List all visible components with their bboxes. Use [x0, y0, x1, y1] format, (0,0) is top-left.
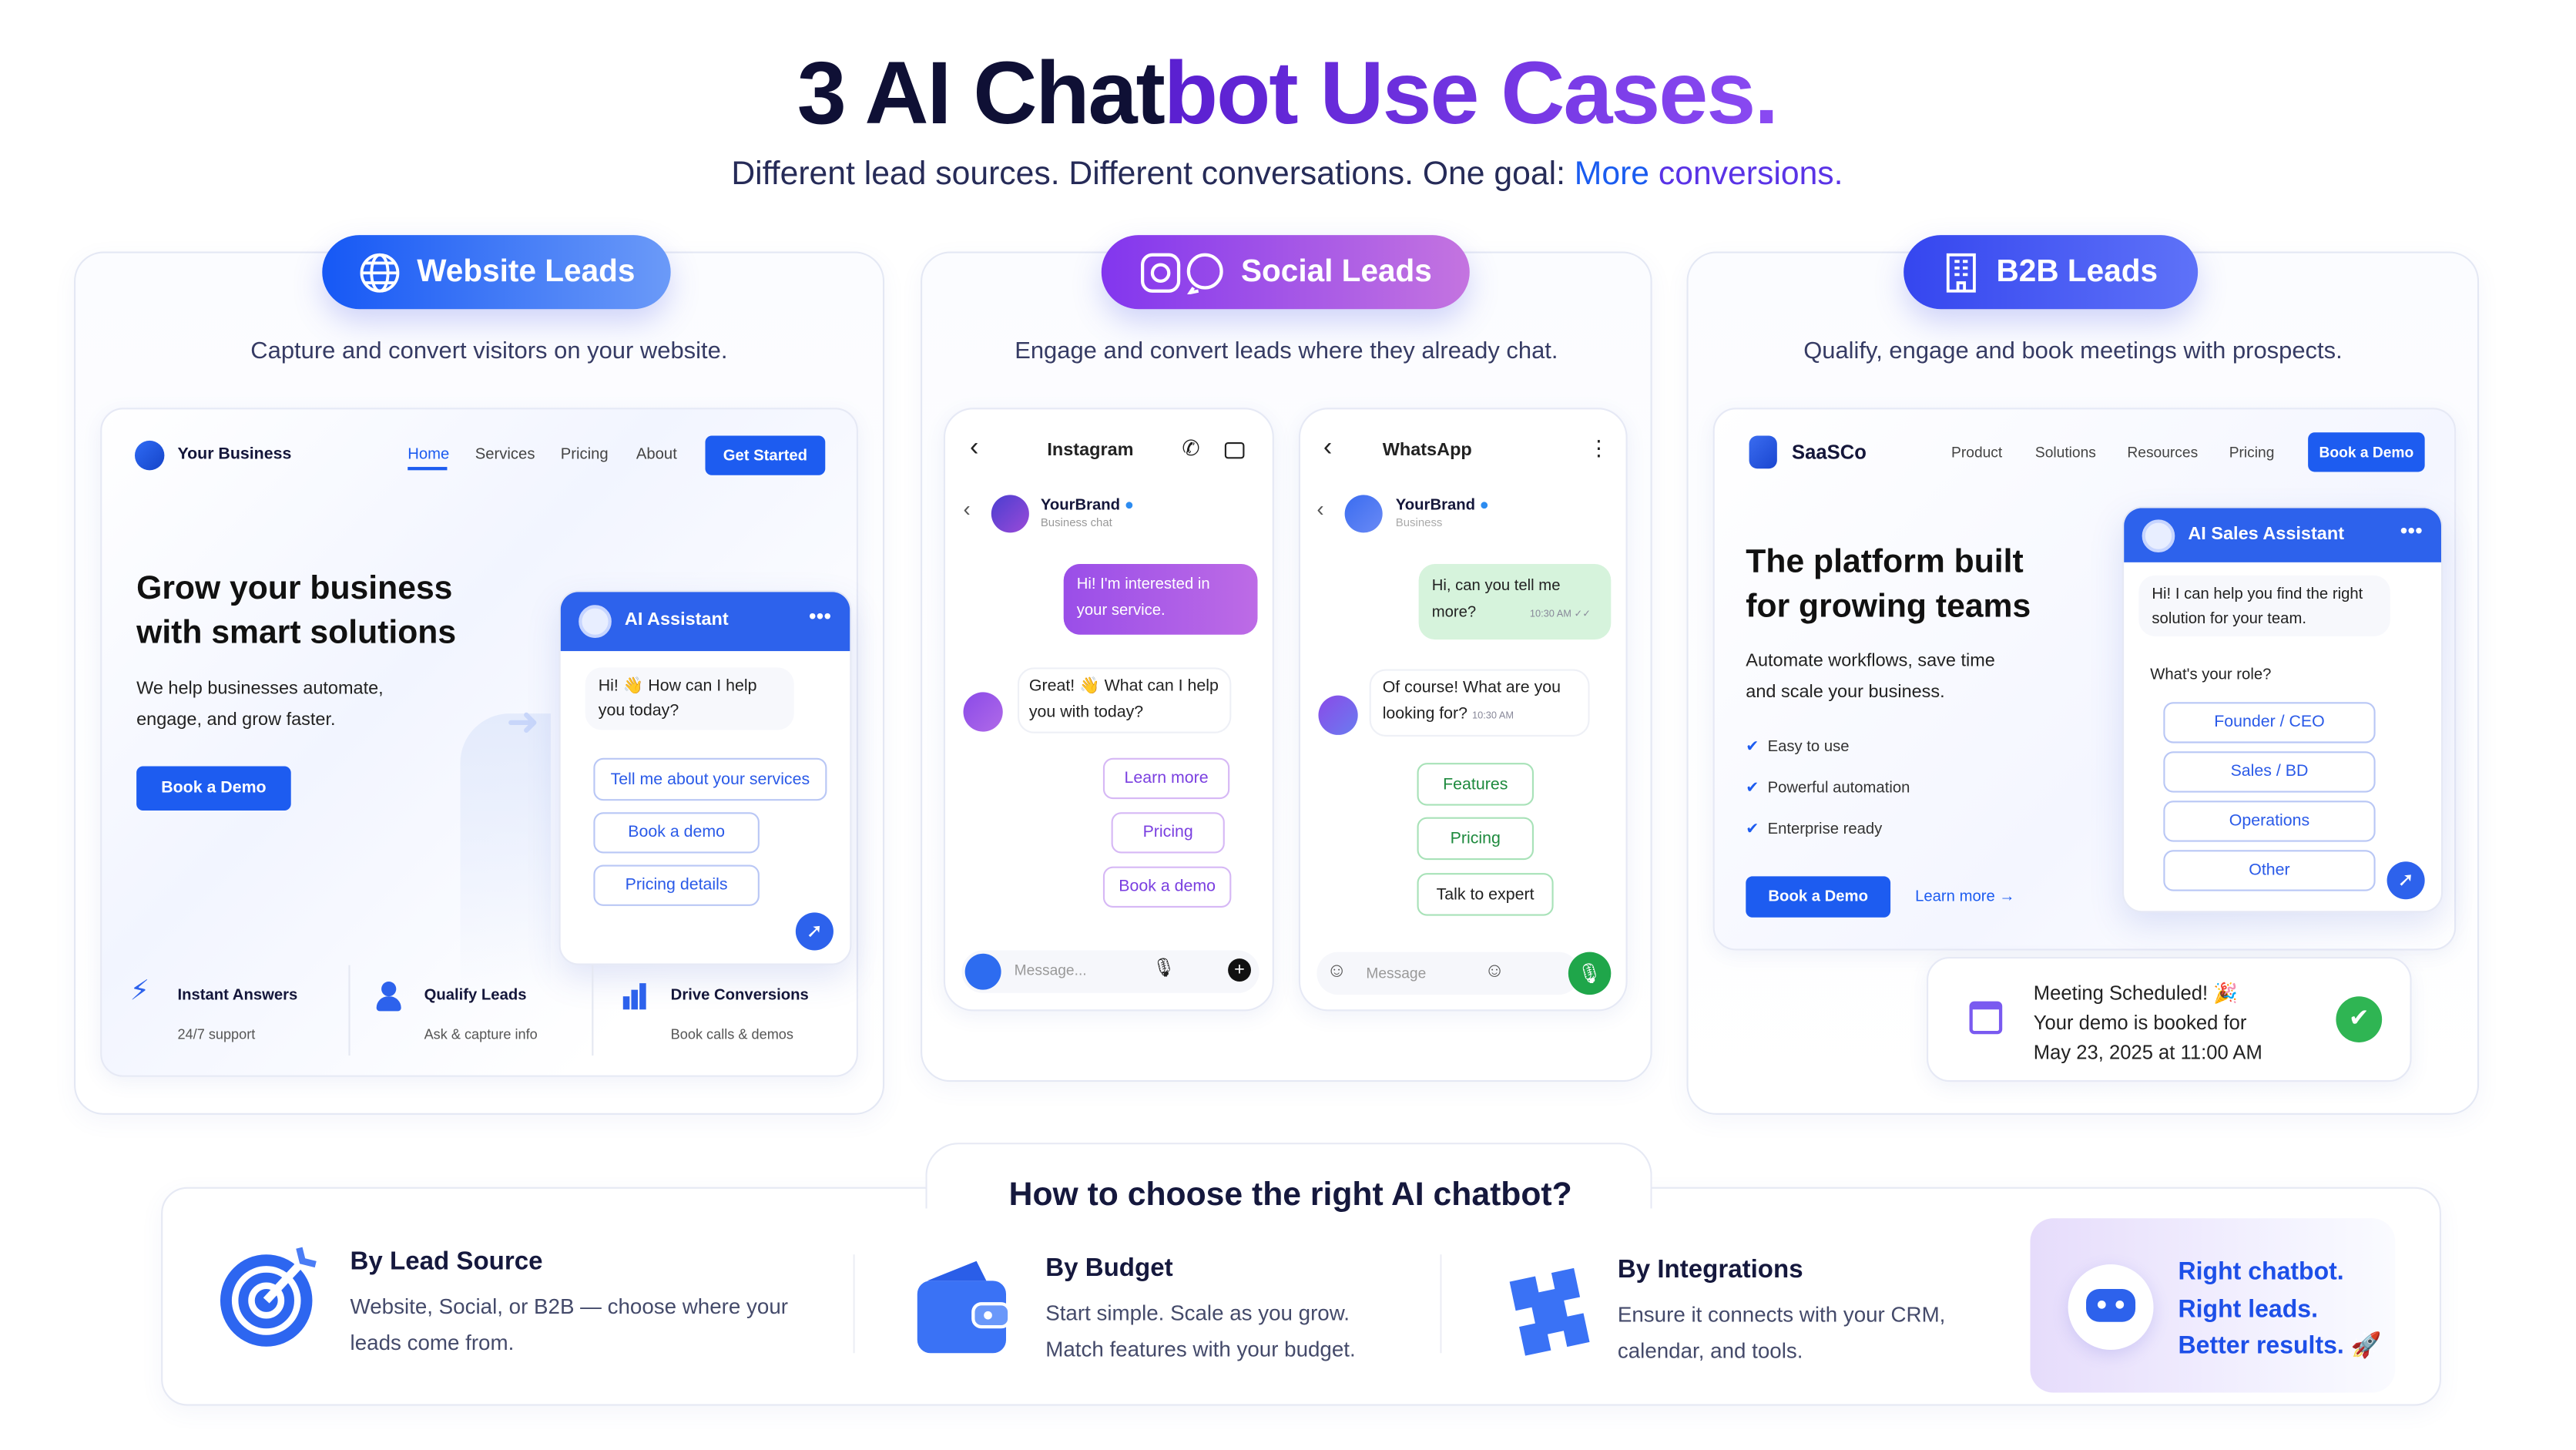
callout: right chatbot [2030, 1218, 2395, 1392]
item: by budget: Start simple. Scale as you grow. [1045, 1301, 1350, 1325]
widget: Hi! 👋 How can I help you today? [599, 677, 756, 720]
widget: ai sales assistant: Hi! I can help you find the right solution for your team. [2152, 586, 2363, 628]
panel: website leads [74, 252, 884, 1115]
b2b mock card [1713, 408, 2456, 950]
phone: instagram: ‹ [964, 496, 971, 521]
item: by lead source: leads come from. [351, 1330, 514, 1354]
hero text: Grow your business [136, 570, 452, 606]
widget: Tell me about your services [611, 770, 810, 788]
phone: whatsapp: more? 10:30 AM ✓✓ [1432, 603, 1591, 622]
text: b2b subtitle: Qualify, engage and book meetings with prospects. [1803, 339, 2343, 365]
phone: whatsapp: ‹ [1323, 434, 1332, 462]
website mock card: ⚡ [130, 975, 149, 1006]
item: by lead source [220, 1247, 788, 1354]
hero text [136, 570, 456, 651]
website mock card: Home [408, 445, 449, 464]
item: by integrations: Ensure it connects with your CRM, [1618, 1302, 1945, 1327]
widget: ai sales assistant: ➚ [2397, 868, 2414, 891]
phone: whatsapp: Of course! What are you looking for? 10:30 AM [1383, 679, 1561, 723]
nav [135, 441, 164, 470]
phone: instagram: Hi! I'm interested in your service. [1077, 576, 1210, 620]
pill: website leads [322, 235, 671, 309]
phone: whatsapp: Business [1396, 518, 1442, 529]
website mock card: Book calls & demos [671, 1026, 793, 1042]
b2b mock card: Book a Demo [1768, 888, 1868, 906]
phone: instagram: ‹ [970, 434, 978, 462]
website mock card: Services [475, 445, 535, 464]
phone: instagram: Book a demo [1119, 878, 1216, 896]
item: by budget: By Budget [1045, 1254, 1173, 1283]
b2b mock card: Solutions [2035, 444, 2096, 461]
b2b mock card: for growing teams [1746, 589, 2031, 625]
item: by lead source: Website, Social, or B2B — choose where your [351, 1294, 788, 1318]
website mock card: Pricing [561, 445, 609, 464]
item: by integrations: By Integrations [1618, 1256, 1803, 1284]
website mock card: ➜ [506, 700, 539, 745]
phone: whatsapp: WhatsApp [1383, 441, 1472, 461]
widget: ai sales assistant [2122, 506, 2443, 912]
pill: social leads [1102, 235, 1470, 309]
meeting scheduled card [1927, 957, 2412, 1082]
phone: instagram: + [1234, 960, 1245, 980]
phone: instagram: Great! 👋 What can I help you with today? [1029, 677, 1219, 722]
b2b mock card: The platform built [1746, 544, 2024, 580]
b2b mock card: Automate workflows, save time [1746, 651, 1995, 671]
item: by budget [917, 1254, 1356, 1361]
widget: Pricing details [626, 876, 728, 895]
widget: Book a demo [628, 824, 725, 842]
website mock card [100, 408, 858, 1077]
phone: whatsapp: Talk to expert [1437, 885, 1535, 904]
text: social subtitle: Engage and convert leads where they already chat. [1015, 339, 1558, 365]
b2b mock card: Book a Demo [2319, 444, 2413, 461]
pill: b2b leads: B2B Leads [1997, 254, 2158, 289]
website mock card: Drive Conversions [671, 986, 809, 1005]
pill: b2b leads [1903, 235, 2198, 309]
widget: ••• [809, 603, 831, 628]
item: by integrations: calendar, and tools. [1618, 1338, 1803, 1363]
phone: whatsapp: Message [1366, 965, 1426, 982]
widget: ai sales assistant: What's your role? [2150, 666, 2271, 684]
widget: ➚ [807, 919, 823, 942]
phone: instagram: Message... [1015, 962, 1087, 978]
item: by lead source: By Lead Source [351, 1248, 543, 1276]
b2b mock card: SaaSCo [1792, 441, 1867, 464]
widget [559, 590, 851, 965]
phone: instagram: YourBrand ● [1041, 496, 1134, 515]
item: by budget: Match features with your budget. [1045, 1337, 1356, 1361]
phone: whatsapp: 🎙 [1577, 962, 1602, 985]
phone: whatsapp: ‹ [1317, 496, 1324, 521]
phone: instagram: Business chat [1041, 518, 1112, 529]
phone: whatsapp: ☺ [1327, 958, 1347, 982]
website mock card: 24/7 support [177, 1026, 255, 1042]
website mock card: Book a Demo [161, 780, 267, 797]
meeting scheduled card: May 23, 2025 at 11:00 AM [2034, 1041, 2262, 1064]
widget: ai sales assistant: Operations [2229, 812, 2309, 831]
text: website subtitle: Capture and convert visitors on your website. [250, 339, 727, 365]
subtitle: Different lead sources. Different conversations. One goal: More conversions. [731, 156, 1843, 193]
website mock card: About [636, 445, 677, 464]
widget: ai sales assistant: AI Sales Assistant [2188, 525, 2344, 544]
b2b mock card: Resources [2127, 444, 2198, 461]
widget: ai sales assistant: ••• [2400, 518, 2423, 542]
callout: right chatbot: Right leads. [2179, 1295, 2318, 1323]
phone: instagram: Learn more [1124, 770, 1209, 787]
heading tab: how to choose [925, 1143, 1652, 1208]
item: by integrations [1510, 1256, 1945, 1363]
website mock card: Your Business [177, 445, 291, 464]
callout: right chatbot: Better results. 🚀 [2179, 1332, 2382, 1360]
b2b mock card: Learn more → [1915, 888, 2015, 906]
phone: whatsapp: Pricing [1451, 830, 1501, 848]
panel: b2b leads [1686, 252, 2479, 1115]
website mock card: Qualify Leads [424, 986, 527, 1005]
b2b mock card: ✔ Easy to use [1746, 738, 1850, 757]
arrow decorative [461, 713, 551, 993]
website mock card: Ask & capture info [424, 1026, 538, 1042]
widget: AI Assistant [625, 610, 729, 629]
widget: ai sales assistant: Sales / BD [2231, 763, 2308, 781]
phone: instagram: Pricing [1143, 824, 1193, 842]
b2b mock card: ✔ Powerful automation [1746, 780, 1910, 797]
heading tab: how to choose: How to choose the right AI chatbot? [1009, 1177, 1572, 1213]
phone: instagram: ✆ [1182, 436, 1200, 461]
meeting scheduled card: ✔ [2349, 1005, 2370, 1032]
phone: instagram: 🎙 [1152, 958, 1176, 978]
phone: whatsapp: Hi, can you tell me [1432, 577, 1560, 596]
pill: website leads: Website Leads [417, 254, 635, 289]
phone: whatsapp [1299, 408, 1628, 1011]
meeting scheduled card: Your demo is booked for [2034, 1011, 2246, 1034]
meeting scheduled card: Meeting Scheduled! 🎉 [2034, 982, 2238, 1005]
b2b mock card: ✔ Enterprise ready [1746, 821, 1882, 838]
website mock card: Instant Answers [177, 986, 297, 1005]
phone: whatsapp: ⋮ [1588, 436, 1609, 461]
phone: whatsapp: YourBrand ● [1396, 496, 1489, 515]
b2b mock card: Product [1951, 444, 2002, 461]
website mock card: We help businesses automate, [136, 679, 384, 699]
website mock card: engage, and grow faster. [136, 710, 336, 730]
phone: whatsapp: Features [1443, 775, 1508, 794]
phone: whatsapp: ☺ [1484, 958, 1504, 982]
b2b mock card: and scale your business. [1746, 683, 1945, 702]
features row [348, 965, 351, 1056]
widget: ai sales assistant: Other [2249, 861, 2290, 880]
b2b mock card: Pricing [2229, 444, 2274, 461]
widget: ai sales assistant: Founder / CEO [2214, 713, 2325, 732]
section: how to choose [161, 1187, 2441, 1406]
website mock card: Get Started [723, 446, 807, 465]
phone: instagram: Instagram [1047, 441, 1134, 461]
phone: instagram [944, 408, 1274, 1011]
title: 3 AI Chatbot Use Cases. [797, 45, 1777, 143]
callout: right chatbot: Right chatbot. [2179, 1258, 2344, 1286]
pill: social leads: Social Leads [1241, 254, 1432, 289]
hero text: with smart solutions [136, 615, 456, 651]
panel: social leads [921, 252, 1652, 1082]
